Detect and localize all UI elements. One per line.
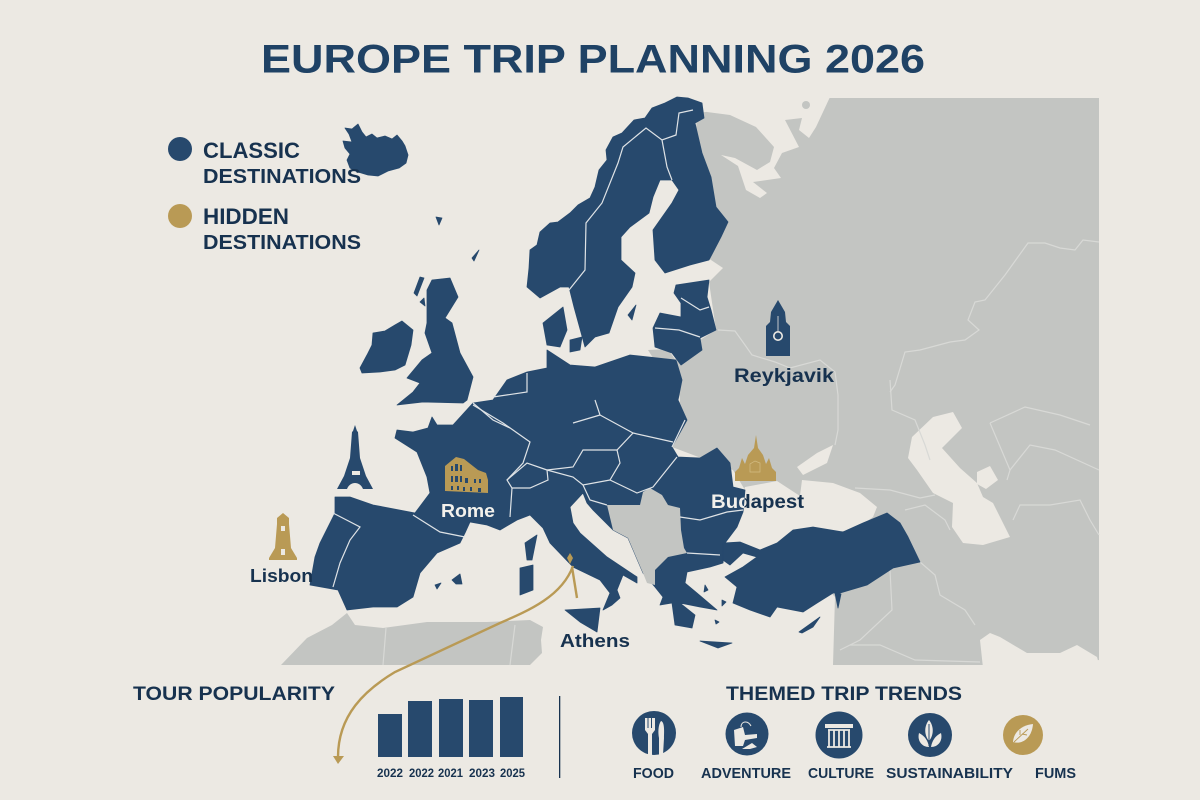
Sea of Azov <box>797 445 833 475</box>
Mainland Europe <box>310 350 745 628</box>
Cyprus <box>799 617 820 633</box>
label: fums: FUMS <box>1035 765 1076 782</box>
Faroe and Shetland islands <box>436 217 479 261</box>
bar chart: tour popularity: 2023 <box>469 768 495 780</box>
legend: classic destinations <box>168 137 361 188</box>
label: Athens: Athens <box>560 631 630 651</box>
Sicily <box>565 608 600 632</box>
icon: leaf <box>1003 715 1043 755</box>
Balkan non-highlighted countries <box>607 488 687 585</box>
label: Reykjavik: Reykjavik <box>734 366 834 387</box>
country borders <box>333 110 743 587</box>
label: culture: CULTURE <box>808 765 874 782</box>
label: Lisbon: Lisbon <box>250 566 313 586</box>
divider <box>559 696 560 778</box>
Corsica and Sardinia <box>520 535 537 595</box>
Denmark <box>543 307 582 352</box>
Lake <box>977 466 998 489</box>
heading: themed trip trends: THEMED TRIP TRENDS <box>726 683 962 705</box>
icon: clock tower <box>766 300 790 356</box>
Gotland <box>628 305 636 320</box>
Balearic islands <box>435 574 462 589</box>
icon: food <box>632 711 676 755</box>
Aegean islands <box>704 585 726 624</box>
label: Budapest: Budapest <box>711 492 805 513</box>
bar chart: tour popularity: 2022 <box>377 768 403 780</box>
non-highlighted land: Russia and the east <box>648 97 1100 668</box>
title: EUROPE TRIP PLANNING 2026 <box>261 38 925 82</box>
legend: hidden destinations: DESTINATIONS <box>203 231 361 254</box>
legend: classic destinations: DESTINATIONS <box>203 165 361 188</box>
non-highlighted land: North Africa <box>281 613 543 665</box>
label: Rome: Rome <box>441 501 495 521</box>
label: adventure: ADVENTURE <box>701 765 791 782</box>
icon: adventure <box>726 712 768 756</box>
legend: hidden destinations <box>168 204 361 254</box>
Scandinavia <box>527 97 728 347</box>
icon: lighthouse <box>269 513 297 560</box>
bar chart: tour popularity: 2022 <box>409 768 434 780</box>
bar chart: tour popularity: 2025 <box>500 768 526 780</box>
bar chart: tour popularity: 2021 <box>438 768 464 780</box>
highlighted countries <box>310 97 920 648</box>
Turkey <box>723 513 920 617</box>
map of Europe <box>281 97 1100 668</box>
arrow: route from Italy to chart <box>333 553 577 764</box>
icon: sustainability <box>908 713 952 757</box>
Black Sea <box>735 480 877 552</box>
Iceland <box>343 124 408 176</box>
label: sustainability: SUSTAINABILITY <box>886 765 1013 782</box>
icon: Budapest parliament <box>735 435 776 481</box>
bar chart: tour popularity <box>377 697 526 780</box>
icon: Colosseum <box>445 457 488 493</box>
Ireland <box>360 321 413 373</box>
Caspian Sea <box>908 412 1010 545</box>
legend: hidden destinations: HIDDEN <box>203 204 289 229</box>
icon: culture <box>816 712 862 758</box>
Great Britain <box>397 278 473 405</box>
Persian Gulf <box>980 633 1100 668</box>
Baltic states <box>653 280 716 365</box>
legend <box>168 137 361 254</box>
label: food: FOOD <box>633 765 674 782</box>
heading: tour popularity: TOUR POPULARITY <box>133 683 335 705</box>
legend: classic destinations: CLASSIC <box>203 138 300 163</box>
Crete <box>700 641 732 648</box>
icon: Eiffel Tower <box>337 425 373 489</box>
